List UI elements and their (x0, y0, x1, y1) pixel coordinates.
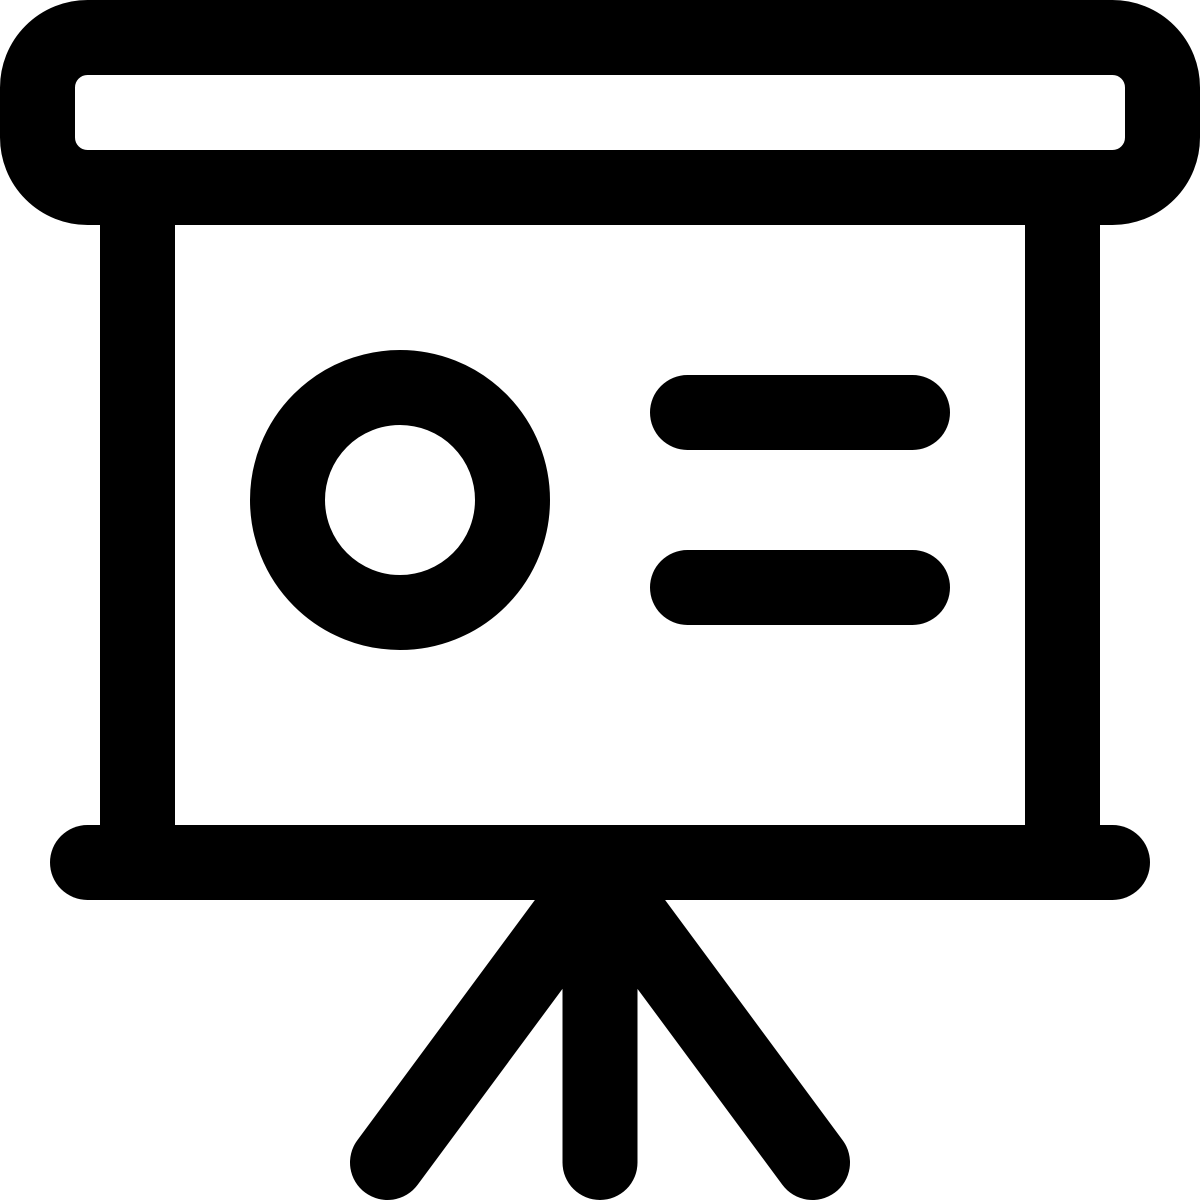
icon: screen side frame (138, 188, 1062, 862)
icon: bottom bar (88, 825, 1112, 900)
icon: text lines on screen (688, 412, 912, 588)
icon: screen roller housing (38, 38, 1162, 188)
icon: tripod legs (388, 862, 812, 1162)
icon: circle on screen (288, 388, 512, 612)
